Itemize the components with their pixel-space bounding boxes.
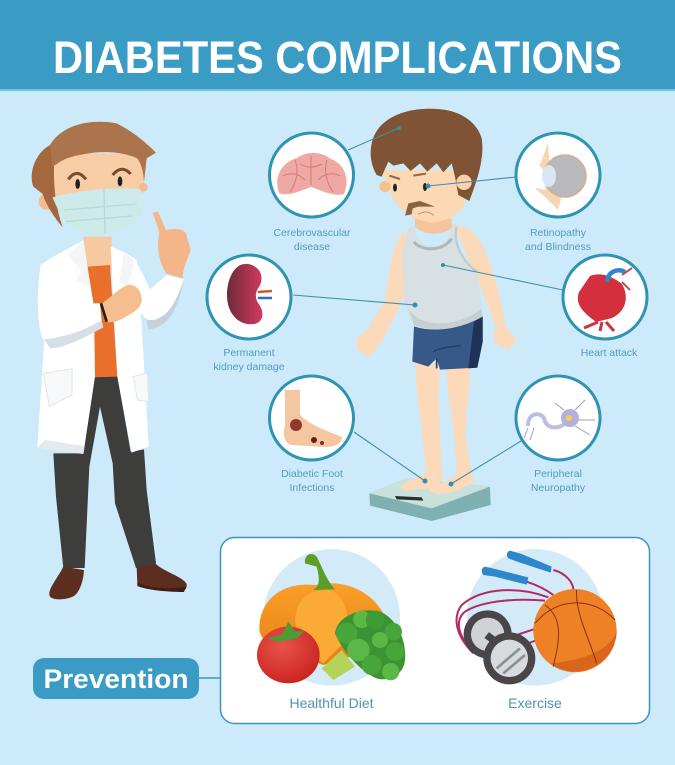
caption: cerebrovascular disease: disease <box>294 241 330 253</box>
basketball <box>533 589 617 672</box>
leader lines <box>293 126 563 486</box>
illustration: healthful diet <box>257 549 405 686</box>
arms <box>357 230 407 356</box>
caption: retinopathy and blindness: and Blindness <box>525 241 591 253</box>
prevention panel <box>220 538 650 724</box>
icon circle: brain <box>270 133 354 217</box>
scale <box>369 478 491 521</box>
prevention label: Prevention <box>44 664 188 694</box>
jump rope <box>457 570 573 653</box>
tank top <box>402 224 483 329</box>
icon circle: heart <box>563 255 647 339</box>
illustration: exercise <box>457 549 617 686</box>
caption: diabetic foot infections: Diabetic Foot <box>281 468 343 480</box>
icon circle: eye <box>516 133 600 217</box>
neck <box>83 237 112 270</box>
icon circle: kidney <box>207 255 291 339</box>
shirt <box>87 265 117 377</box>
shorts <box>412 317 483 370</box>
mustache <box>405 201 435 216</box>
pants <box>53 376 156 568</box>
icon circle: foot <box>270 376 354 460</box>
caption: diabetic foot infections: Infections <box>290 482 334 494</box>
caption: exercise: Exercise <box>508 695 562 711</box>
caption: peripheral neuropathy: Neuropathy <box>531 482 586 494</box>
tomato <box>257 627 320 683</box>
broccoli <box>322 650 355 680</box>
caption: permanent kidney damage: Permanent <box>223 347 275 359</box>
hands <box>102 285 142 322</box>
shoes <box>49 567 84 599</box>
coat body <box>37 240 95 454</box>
caption: peripheral neuropathy: Peripheral <box>534 468 582 480</box>
prevention label <box>33 658 199 699</box>
arms <box>38 265 102 339</box>
face mask <box>53 188 144 235</box>
hair <box>371 109 482 201</box>
icon circle: neuron <box>516 376 600 460</box>
title: DIABETES COMPLICATIONS <box>53 32 622 83</box>
caption: heart attack: Heart attack <box>581 347 638 359</box>
man illustration <box>357 109 517 521</box>
caption: retinopathy and blindness: Retinopathy <box>530 227 586 239</box>
prevention connector <box>199 677 220 679</box>
dumbbell <box>464 610 512 658</box>
caption: healthful diet: Healthful Diet <box>289 695 374 711</box>
head <box>415 218 452 234</box>
doctor illustration <box>32 122 191 599</box>
legs <box>400 362 443 491</box>
caption: permanent kidney damage: kidney damage <box>213 361 285 373</box>
pumpkin <box>259 583 384 665</box>
caption: cerebrovascular disease: Cerebrovascular <box>273 227 351 239</box>
header banner <box>0 0 675 91</box>
head <box>52 153 147 202</box>
arm shadows <box>43 321 103 348</box>
